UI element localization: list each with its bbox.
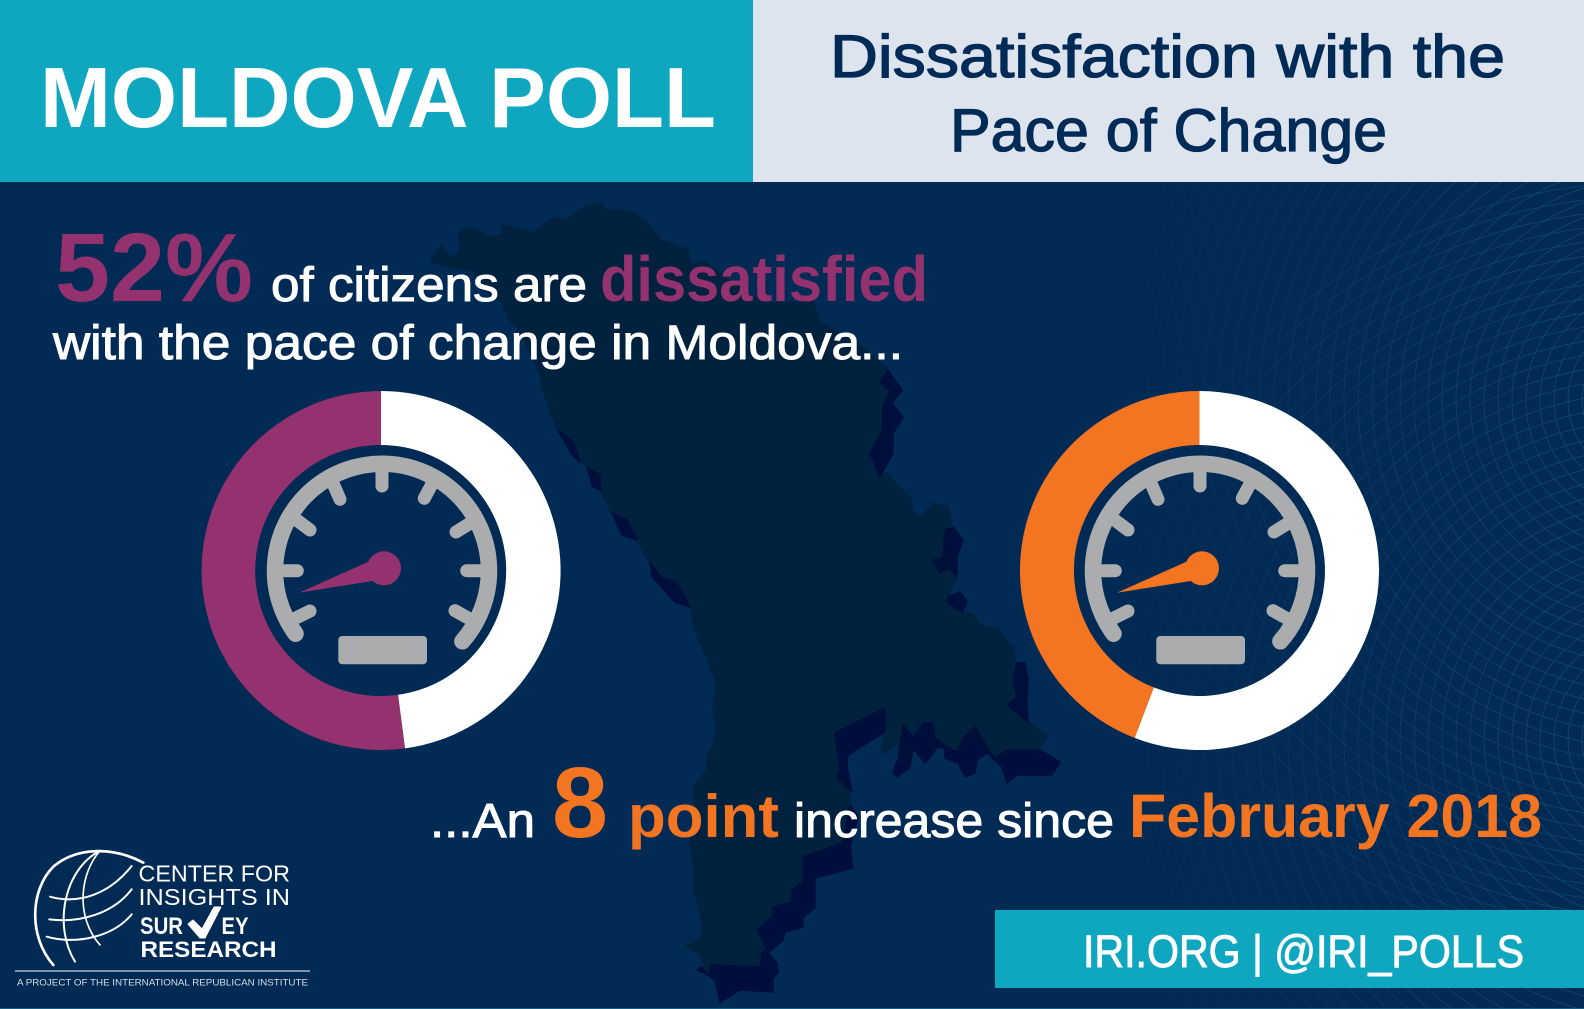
map landmass <box>431 203 1047 975</box>
donut purple segment <box>202 391 405 750</box>
icon: check mark <box>188 907 221 938</box>
heading: Dissatisfaction with the Pace of Change: Pace of Change <box>950 97 1387 164</box>
logo text: INSIGHTS IN <box>138 884 290 910</box>
speedometer readout <box>1156 636 1245 664</box>
statistic: 8: 8 <box>552 747 608 859</box>
statistic: 52%: 52% <box>55 213 253 322</box>
logo text: RESEARCH <box>140 937 276 962</box>
logo text: EY <box>222 913 248 940</box>
map darker border regions <box>558 370 1060 1002</box>
text: of citizens are: of citizens are <box>271 259 587 312</box>
donut white segment <box>1135 391 1379 750</box>
donut white segment <box>381 391 561 748</box>
bottom statement: 8 point increase <box>430 747 1542 859</box>
text: ...An: ...An <box>430 795 535 848</box>
speedometer readout <box>338 636 427 664</box>
text: increase since: increase since <box>794 795 1114 848</box>
map of Moldova <box>431 203 1060 1002</box>
heading: Dissatisfaction with the Pace of Change <box>830 23 1505 164</box>
logo text: SUR <box>140 913 183 940</box>
logo: Center for Insights in Survey Research <box>15 851 310 989</box>
speedometer dial <box>1093 464 1307 641</box>
header panel: teal <box>0 0 753 182</box>
gauge: orange 44% <box>1020 391 1379 750</box>
footer link text: IRI.ORG | @IRI_POLLS <box>1083 926 1524 977</box>
speedometer dial <box>275 464 489 641</box>
needle <box>1117 551 1219 593</box>
needle <box>299 551 401 593</box>
logo text: CENTER FOR <box>138 861 290 887</box>
title: Moldova Poll: MOLDOVA POLL <box>40 51 716 146</box>
text: with the pace of change in Moldova: with the pace of change in Moldova... <box>52 317 903 370</box>
logo tagline: A PROJECT OF THE INTERNATIONAL REPUBLICAN INSTITUTE <box>17 978 308 989</box>
emphasis: dissatisfied: dissatisfied <box>600 243 928 315</box>
headline text: 52% dissatisfied <box>52 213 928 370</box>
logo text <box>138 861 290 962</box>
gauge: purple 52% <box>202 391 561 750</box>
emphasis: February 2018: February 2018 <box>1129 782 1542 850</box>
heading: Dissatisfaction with the Pace of Change: Dissatisfaction with the <box>830 23 1505 90</box>
emphasis: point: point <box>628 783 779 850</box>
footer bar <box>995 910 1584 988</box>
donut orange segment <box>1020 391 1200 738</box>
header panel: light <box>753 0 1584 182</box>
icon: globe <box>35 851 143 965</box>
